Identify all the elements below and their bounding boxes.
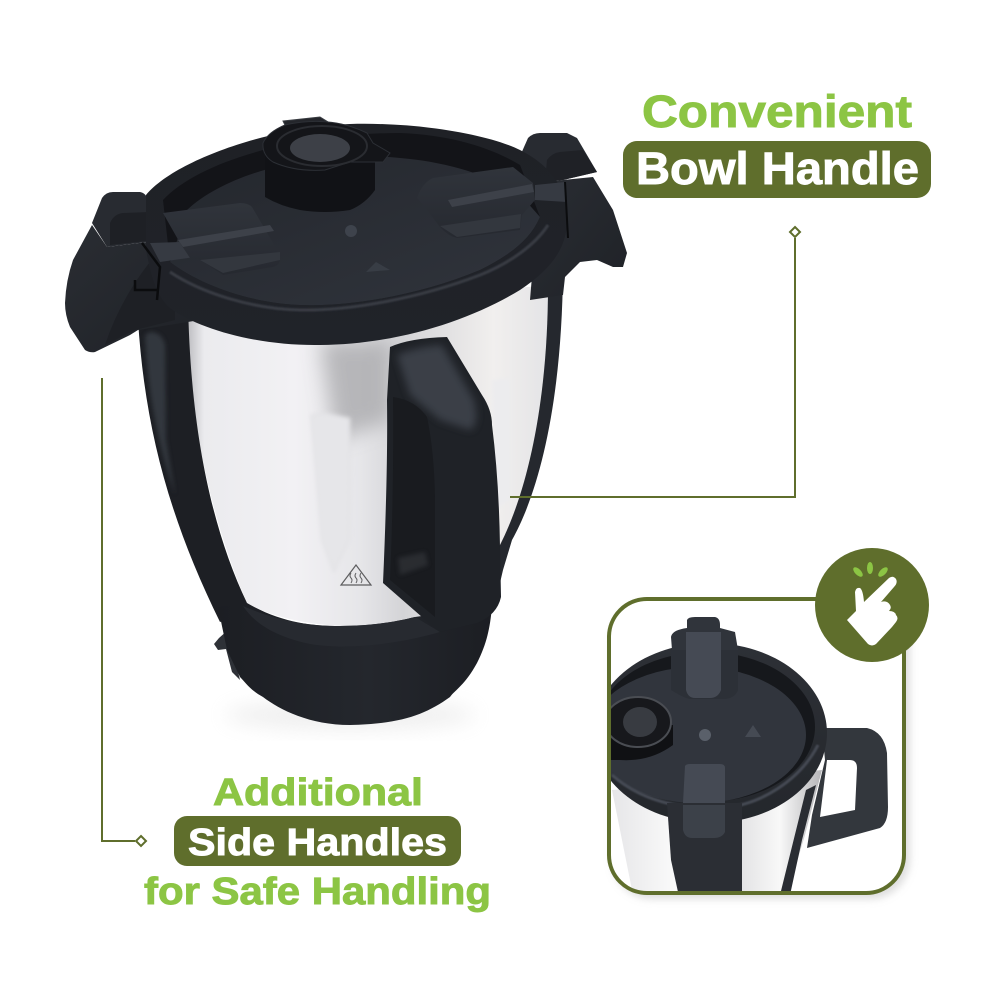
cap button — [290, 134, 350, 162]
left tab stripe — [178, 225, 274, 247]
handle highlight — [397, 345, 476, 430]
inset surface — [611, 669, 806, 802]
inset dimple — [699, 729, 711, 741]
left wing lower inner — [105, 262, 175, 345]
icon: tapping hand badge — [815, 548, 929, 662]
steam cap — [263, 117, 390, 212]
right connector bar — [535, 182, 567, 202]
connector line: side handles — [102, 378, 146, 846]
front pad upper — [683, 764, 725, 803]
label pill — [174, 816, 461, 866]
front wing — [667, 803, 742, 892]
inset triangle mark — [745, 725, 761, 737]
handle opening — [390, 397, 435, 617]
heat warning triangle — [341, 565, 371, 585]
right wing — [517, 133, 627, 300]
heading line 3: for Safe Handling — [144, 871, 491, 913]
hand — [847, 577, 898, 646]
heading: additional side handles — [144, 772, 491, 913]
front pad lower — [683, 805, 725, 838]
product: thermomix-style steel bowl — [65, 117, 627, 729]
badge circle — [815, 548, 929, 662]
rim ridge highlight — [170, 225, 548, 310]
inset strap — [780, 785, 816, 895]
inset recess — [611, 656, 815, 800]
heading word: Convenient — [642, 86, 912, 137]
lid recess — [163, 133, 540, 305]
left wing top — [92, 192, 170, 247]
panel border — [609, 599, 904, 893]
back wing — [671, 617, 738, 650]
base band — [243, 606, 440, 647]
base knob — [214, 630, 240, 680]
left wing lower — [65, 225, 200, 352]
lid rim — [146, 124, 567, 345]
lid surface — [170, 156, 540, 305]
back pad — [686, 632, 721, 698]
cap hinge — [283, 117, 328, 135]
right tab stripe — [448, 184, 534, 207]
left tab top — [163, 203, 280, 275]
tap sparks — [852, 562, 889, 578]
panel shadow — [612, 603, 910, 899]
cap cylinder — [265, 155, 375, 212]
left hinge slit — [135, 243, 160, 300]
left strap — [138, 300, 250, 622]
inset front tab — [667, 764, 742, 892]
right wing top — [517, 133, 597, 183]
ground shadow — [225, 701, 475, 729]
left lid tab — [135, 203, 280, 300]
left wing — [65, 192, 200, 352]
left connector bar — [150, 242, 195, 262]
steel groove — [311, 413, 350, 572]
steel bowl body — [186, 285, 548, 627]
opening reflection — [398, 552, 428, 575]
right wing lower — [530, 177, 627, 300]
pill text: Side Handles — [188, 822, 447, 864]
base — [218, 603, 492, 725]
right strap — [490, 270, 563, 600]
panel: inset top view — [590, 598, 910, 899]
inset cap — [611, 696, 673, 760]
heading: convenient bowl handle — [623, 86, 931, 198]
right tab step — [440, 214, 521, 237]
right wing top front — [545, 150, 597, 182]
inset back tab — [671, 617, 738, 699]
left tab step — [200, 252, 280, 273]
inset steel — [612, 770, 822, 895]
right groove — [492, 378, 510, 510]
right lid tab — [417, 167, 568, 238]
lid triangle mark — [366, 262, 390, 272]
handle body — [383, 337, 501, 632]
pill text: Bowl Handle — [636, 143, 919, 194]
right tab top — [417, 167, 535, 238]
connector line: bowl handle — [510, 227, 800, 497]
left strap highlight — [145, 332, 175, 495]
inset cap top — [605, 697, 671, 747]
inset cap cylinder — [611, 725, 673, 760]
inset photo — [590, 617, 888, 895]
steel top band — [320, 340, 392, 440]
inset rim ridge — [612, 745, 818, 808]
right hinge slit — [565, 182, 568, 238]
lid dimple — [345, 225, 357, 237]
inset cap button — [623, 707, 657, 737]
label pill — [623, 141, 931, 198]
handle — [383, 337, 501, 632]
panel background — [608, 598, 905, 894]
cap ring — [277, 126, 367, 166]
cap top — [263, 121, 390, 170]
back block — [671, 652, 738, 672]
inset handle — [807, 728, 888, 848]
left wing top front — [110, 212, 167, 245]
inset rim — [611, 646, 827, 820]
heading line 1: Additional — [213, 772, 423, 814]
